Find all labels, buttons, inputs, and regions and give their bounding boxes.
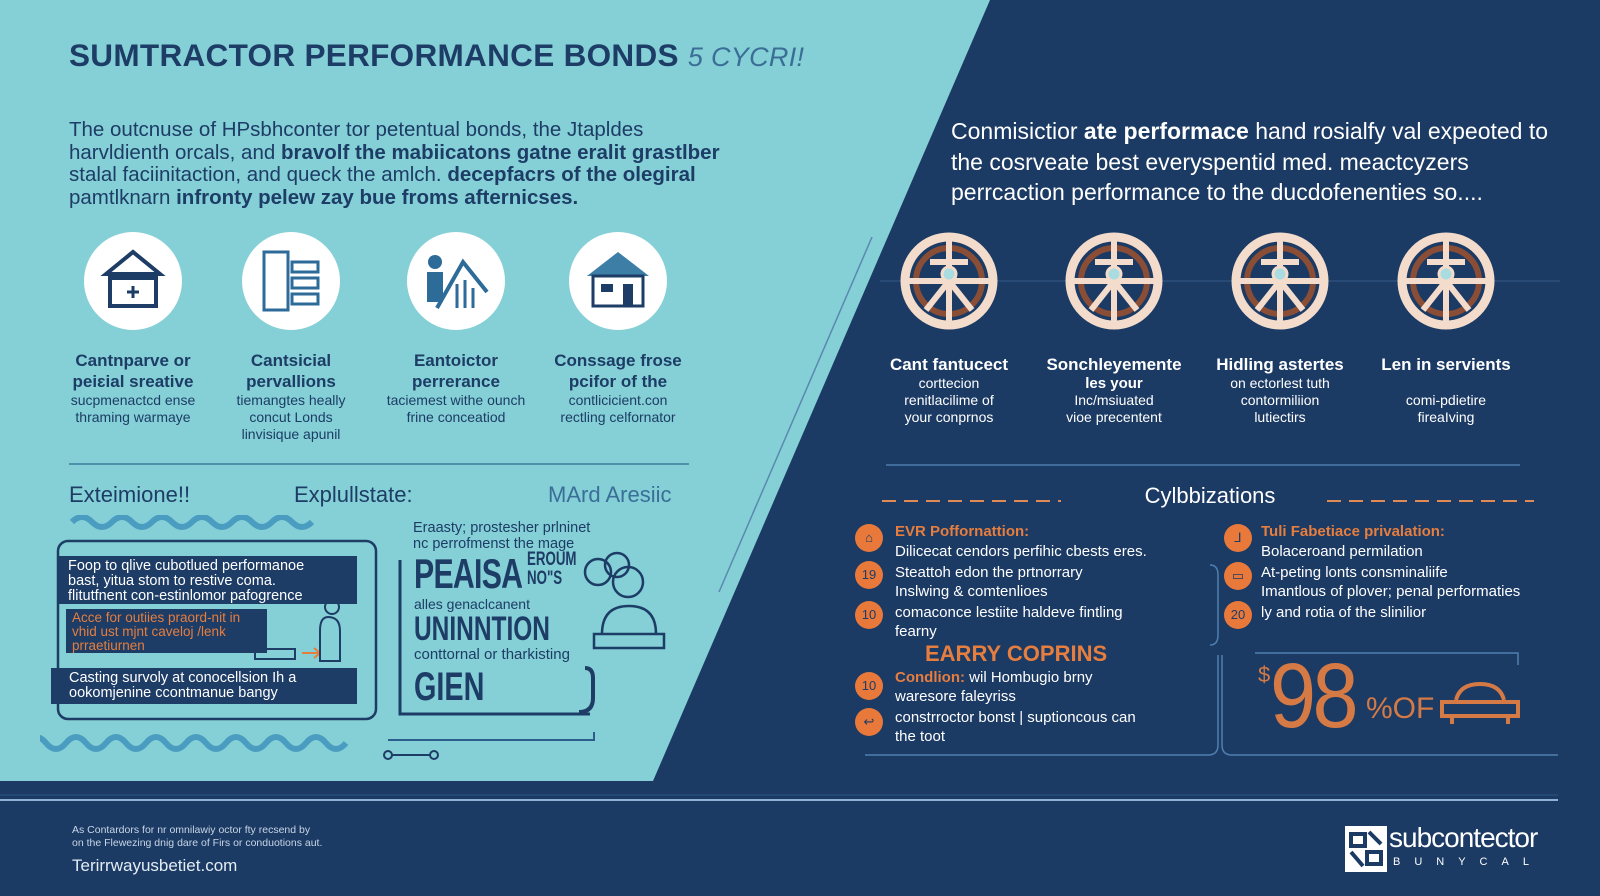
left labels: peiɛial sreative xyxy=(73,372,193,391)
left list: EARRY COPRINS xyxy=(925,641,1107,666)
text: pcifor of the xyxy=(569,372,667,391)
right list: 20 xyxy=(1231,607,1245,622)
text: frine conceatiod xyxy=(407,409,505,425)
right list: ⅃ xyxy=(1234,530,1242,545)
left labels xyxy=(71,351,195,425)
right intro paragraph: Conmisictior ate performace hand rosialfy val expeoted to xyxy=(951,118,1548,144)
text: lutiectirs xyxy=(1254,409,1306,425)
text: Len in servients xyxy=(1381,355,1511,374)
left list: constrroctor bonst | suptioncous can xyxy=(895,709,1136,726)
left list: the toot xyxy=(895,728,945,745)
text: Hidling astertes xyxy=(1216,355,1344,374)
footer disclaimer: on the Flewezing dnig dare of Firs or conduotions aut. xyxy=(72,837,322,849)
icon: people xyxy=(254,604,341,662)
text: Eantoictor xyxy=(414,351,498,370)
right outline panel: NO"S xyxy=(527,568,562,589)
right outline panel: nc perrofmenst the mage xyxy=(413,536,574,552)
text: contormiliion xyxy=(1241,392,1319,408)
stat: 98% xyxy=(1258,645,1520,747)
icon: people chart xyxy=(407,232,505,330)
text bar 1 xyxy=(58,556,357,604)
text bar 3: ookomjenine ccontmanue bangy xyxy=(69,685,278,701)
text: Inc/msiuated xyxy=(1074,392,1154,408)
logo: subcontector xyxy=(1389,822,1537,853)
left list xyxy=(855,523,1147,745)
section heading with dashed arrows: Cylbbizations xyxy=(1145,483,1275,508)
footer url: Terirrwayusbetiet.com xyxy=(72,856,237,875)
text: Conssage frose xyxy=(554,351,682,370)
right outline panel: Eraasty; prostesher prlninet xyxy=(413,520,590,536)
text bar 1: flitutfnent con-estinlomor pafogrence xyxy=(68,588,303,604)
orange text bar: Acce for outiies praord-nit in xyxy=(72,610,240,625)
text: Cantsicial xyxy=(251,351,331,370)
right list: ▭ xyxy=(1232,568,1244,583)
text: concut Londs xyxy=(249,409,333,425)
right outline panel: EROUM xyxy=(527,549,577,570)
right outline panel: alles genaclcanent xyxy=(414,596,530,612)
icon: car xyxy=(1440,682,1520,724)
intro paragraph: pamtlknarn infronty pelew zay bue froms afternicses. xyxy=(69,186,578,208)
text: pervallions xyxy=(246,372,336,391)
right outline panel xyxy=(383,520,666,760)
title: SUMTRACTOR PERFORMANCE BONDS 5 CYCRI! xyxy=(69,37,804,73)
left icons row xyxy=(84,232,667,330)
icon: documents xyxy=(242,232,340,330)
stat: 98%: 98 xyxy=(1270,645,1355,747)
left list: ⌂ xyxy=(865,530,873,545)
left list: Dilicecat cendors perfihic cbests eres. xyxy=(895,543,1147,560)
text: les your xyxy=(1085,375,1143,392)
orange text bar: vhid ust mjnt caveloj /lenk xyxy=(72,624,226,639)
sub headings: Exteimione!! xyxy=(69,482,190,507)
text bar 3: Casting survoly at conocellsion Ih a xyxy=(69,670,296,686)
text: perrerance xyxy=(412,372,500,391)
text: contlicicient.con xyxy=(569,392,667,408)
left list: Condlion: wil Hombugio brny xyxy=(895,669,1093,686)
left speech box panel xyxy=(40,515,378,752)
text: vioe precentent xyxy=(1066,409,1162,425)
right list: At-peting lonts consminaliife xyxy=(1261,564,1448,581)
right wheel icons xyxy=(900,232,1494,330)
left list: Steattoh edon the prtnorrary xyxy=(895,564,1083,581)
right list: ly and rotia of the slinilior xyxy=(1261,604,1426,621)
right labels xyxy=(890,355,1008,425)
intro paragraph: The outcnuse of HPsbhconter tor petentual bonds, the Jtapldes xyxy=(69,118,643,141)
left list: fearny xyxy=(895,623,937,640)
text bar 3 xyxy=(51,668,357,704)
right labels: your conprnos xyxy=(905,409,993,425)
right list: Imantlous of plover; penal performaties xyxy=(1261,583,1520,600)
icon: house xyxy=(569,232,667,330)
text: Sonchleyemente xyxy=(1046,355,1182,374)
logo: BUNYCAL xyxy=(1393,856,1543,868)
right list: Bolaceroand permilation xyxy=(1261,543,1423,560)
right labels: corttecion xyxy=(919,375,979,391)
intro paragraph: stalal faciinitaction, and queck the amlch. decepfacrs of the olegiral xyxy=(69,163,696,186)
stat: 98%: $ xyxy=(1258,662,1270,687)
text: tiemangtes heally xyxy=(237,392,345,408)
right outline panel: UNINNTION xyxy=(414,610,550,648)
intro paragraph xyxy=(69,118,720,208)
orange text bar: prraetiurnen xyxy=(72,638,145,653)
text: MArd Aresiic xyxy=(548,482,671,507)
text: linvisique apunil xyxy=(242,426,340,442)
left labels: thraming warmaye xyxy=(75,409,191,425)
left list: waresore faleyriss xyxy=(895,688,1016,705)
left list: EVR Poffornattion: xyxy=(895,523,1029,540)
right list xyxy=(1224,523,1520,629)
right labels: renitlacilime of xyxy=(904,392,994,408)
icon: building xyxy=(84,232,182,330)
left labels: sucpmenactcd ense xyxy=(71,392,195,408)
left list: 10 xyxy=(862,678,876,693)
right outline panel: PEAISA xyxy=(414,550,522,597)
text: on ectorlest tuth xyxy=(1230,375,1330,391)
left list: comaconce lestiite haldeve fintling xyxy=(895,604,1123,621)
text: comi-pdietire xyxy=(1406,392,1486,408)
text bar 1: Foop to qlive cubotlued performanoe xyxy=(68,558,304,574)
right intro paragraph: perrcaction performance to the ducdofenenties so.... xyxy=(951,179,1483,205)
right labels: Cant fantucect xyxy=(890,355,1008,374)
text: rectling celfornator xyxy=(560,409,676,425)
left list: ↩ xyxy=(864,714,874,729)
footer disclaimer: As Contardors for nr omnilawiy octor fty recsend by xyxy=(72,824,310,836)
right outline panel: conttornal or tharkisting xyxy=(414,646,570,663)
right list: Tuli Fabetiace privalation: xyxy=(1261,523,1445,540)
left list: Inslwing & comtenlioes xyxy=(895,583,1048,600)
text: taciemest withe ounch xyxy=(387,392,525,408)
text: fireaIving xyxy=(1418,409,1474,425)
left labels: Cantnparve or xyxy=(75,351,191,370)
stat: 98%: %OF xyxy=(1366,692,1434,725)
orange text bar xyxy=(66,609,267,653)
text: Explullstate: xyxy=(294,482,413,507)
logo xyxy=(1345,822,1543,872)
intro paragraph: harvldienth orcals, and bravolf the mabiicatons gatne eralit grastlber xyxy=(69,140,720,164)
text bar 1: bast, yitua stom to restive coma. xyxy=(68,573,276,589)
right outline panel: GIEN xyxy=(414,665,484,709)
right intro paragraph xyxy=(951,118,1548,205)
footer disclaimer xyxy=(72,824,322,849)
left list: 19 xyxy=(862,567,876,582)
left list: 10 xyxy=(862,607,876,622)
bracket lines xyxy=(865,564,1558,756)
right intro paragraph: the cosrveate best everyspentid med. meactcyzers xyxy=(951,148,1469,174)
